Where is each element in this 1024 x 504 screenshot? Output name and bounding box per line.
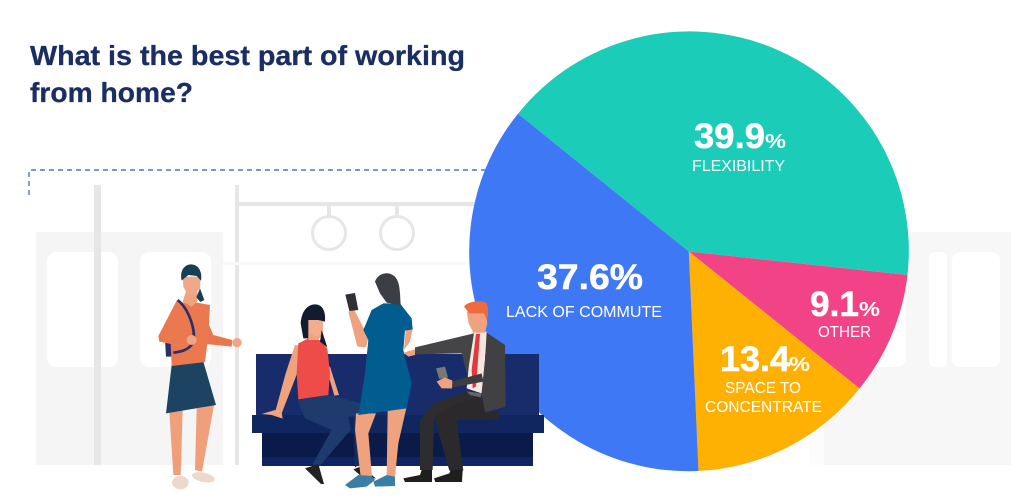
label: 37.6% lack of commute xyxy=(506,258,662,321)
label: 39.9% flexibility: FLEXIBILITY xyxy=(692,158,785,175)
label: 13.4% space to concentrate: % xyxy=(789,354,810,376)
slice: other xyxy=(689,252,908,388)
label: 37.6% lack of commute: LACK OF COMMUTE xyxy=(506,304,662,321)
figure: seated woman in red top xyxy=(262,304,376,484)
label: 9.1% other: OTHER xyxy=(818,324,871,341)
title xyxy=(30,40,465,108)
label: 13.4% space to concentrate: CONCENTRATE xyxy=(705,399,822,416)
label: 13.4% space to concentrate: SPACE TO xyxy=(725,380,801,397)
label: 39.9% flexibility xyxy=(692,117,786,175)
label: 37.6% lack of commute: 37.6% xyxy=(537,258,643,297)
figure: standing woman with backpack xyxy=(158,264,242,489)
label: 39.9% flexibility: 39.9 xyxy=(694,117,765,156)
title: from home? xyxy=(30,77,193,108)
slice: flexibility xyxy=(518,31,909,275)
slice: space to concentrate xyxy=(689,252,860,471)
background: subway train interior xyxy=(36,185,1011,465)
label: 13.4% space to concentrate: 13.4 xyxy=(720,340,791,379)
bench seat xyxy=(252,354,544,466)
label: 13.4% space to concentrate xyxy=(705,340,822,416)
label: 9.1% other: % xyxy=(859,299,880,321)
pie chart xyxy=(469,31,909,471)
label: 9.1% other xyxy=(810,285,880,341)
figure: standing woman in blue dress with phone xyxy=(345,273,413,488)
dashed bracket line xyxy=(29,170,490,195)
slice: lack of commute xyxy=(469,114,698,471)
title: What is the best part of working xyxy=(30,40,465,71)
label: 39.9% flexibility: % xyxy=(765,131,786,153)
figure: seated man in suit with phone xyxy=(403,301,506,482)
label: 9.1% other: 9.1 xyxy=(810,285,859,324)
